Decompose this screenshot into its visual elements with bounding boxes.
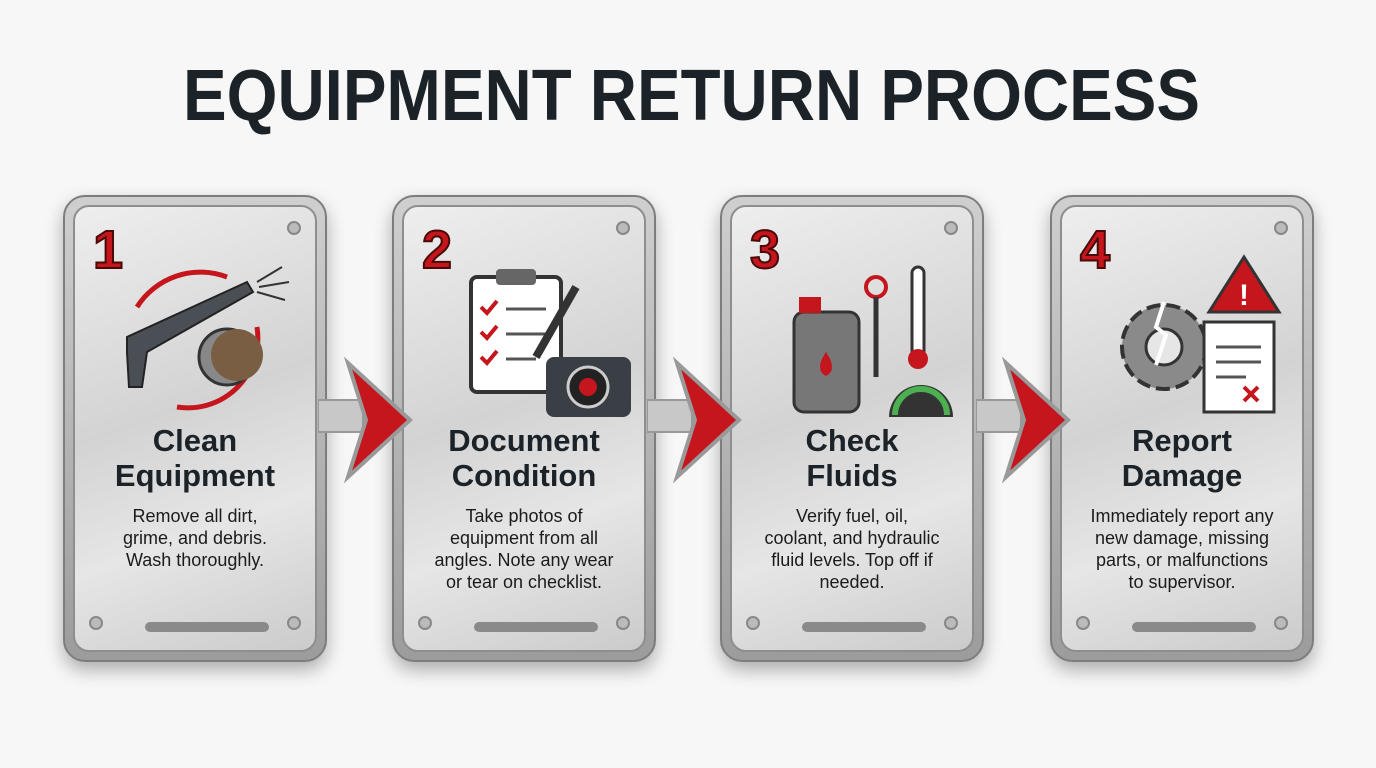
panel: check fluids: 3 <box>750 220 780 280</box>
panel: report damage <box>1050 195 1314 662</box>
panel: check fluids: Fluids <box>806 458 898 493</box>
arrow 2 <box>647 356 742 484</box>
icon: broken gear, warning, report: ! <box>1239 279 1249 312</box>
panel: report damage: new damage, missing <box>1095 528 1269 548</box>
panel: clean equipment: 1 <box>93 220 123 280</box>
panel: clean equipment: Clean <box>153 423 237 458</box>
panel: document condition: Take photos of <box>465 506 583 526</box>
icon: pressure washer <box>126 266 290 410</box>
panel: document condition: Condition <box>452 458 596 493</box>
arrow 1 <box>318 356 413 484</box>
panel: clean equipment: Wash thoroughly. <box>126 550 264 570</box>
panel: check fluids <box>720 195 984 662</box>
panel: check fluids: needed. <box>819 572 885 592</box>
panel: document condition <box>392 195 656 662</box>
panel: document condition: angles. Note any wear <box>434 550 614 570</box>
panel: report damage: parts, or malfunctions <box>1096 550 1268 570</box>
panel: clean equipment: grime, and debris. <box>123 528 267 548</box>
panel: clean equipment <box>63 195 327 662</box>
icon: broken gear, warning, report <box>1120 254 1282 414</box>
panel: report damage: to supervisor. <box>1128 572 1236 592</box>
panel: check fluids: Verify fuel, oil, <box>796 506 908 526</box>
icon: clipboard and camera <box>469 269 631 417</box>
panel: report damage: 4 <box>1080 220 1110 280</box>
panel: report damage: Immediately report any <box>1090 506 1274 526</box>
panel: document condition: or tear on checklist. <box>446 572 602 592</box>
panel: check fluids: Check <box>805 423 899 458</box>
arrow 3 <box>976 356 1071 484</box>
icon: oil jug, dipstick, gauge <box>792 266 953 417</box>
panel: clean equipment: Remove all dirt, <box>132 506 258 526</box>
panel: report damage: Report <box>1132 423 1232 458</box>
panel: report damage: Damage <box>1122 458 1242 493</box>
panel: check fluids: coolant, and hydraulic <box>764 528 940 548</box>
panel: document condition: Document <box>448 423 600 458</box>
panel: document condition: equipment from all <box>450 528 598 548</box>
panel: clean equipment: Equipment <box>115 458 275 493</box>
title: EQUIPMENT RETURN PROCESS <box>183 56 1200 136</box>
panel: check fluids: fluid levels. Top off if <box>771 550 933 570</box>
panel: document condition: 2 <box>422 220 452 280</box>
